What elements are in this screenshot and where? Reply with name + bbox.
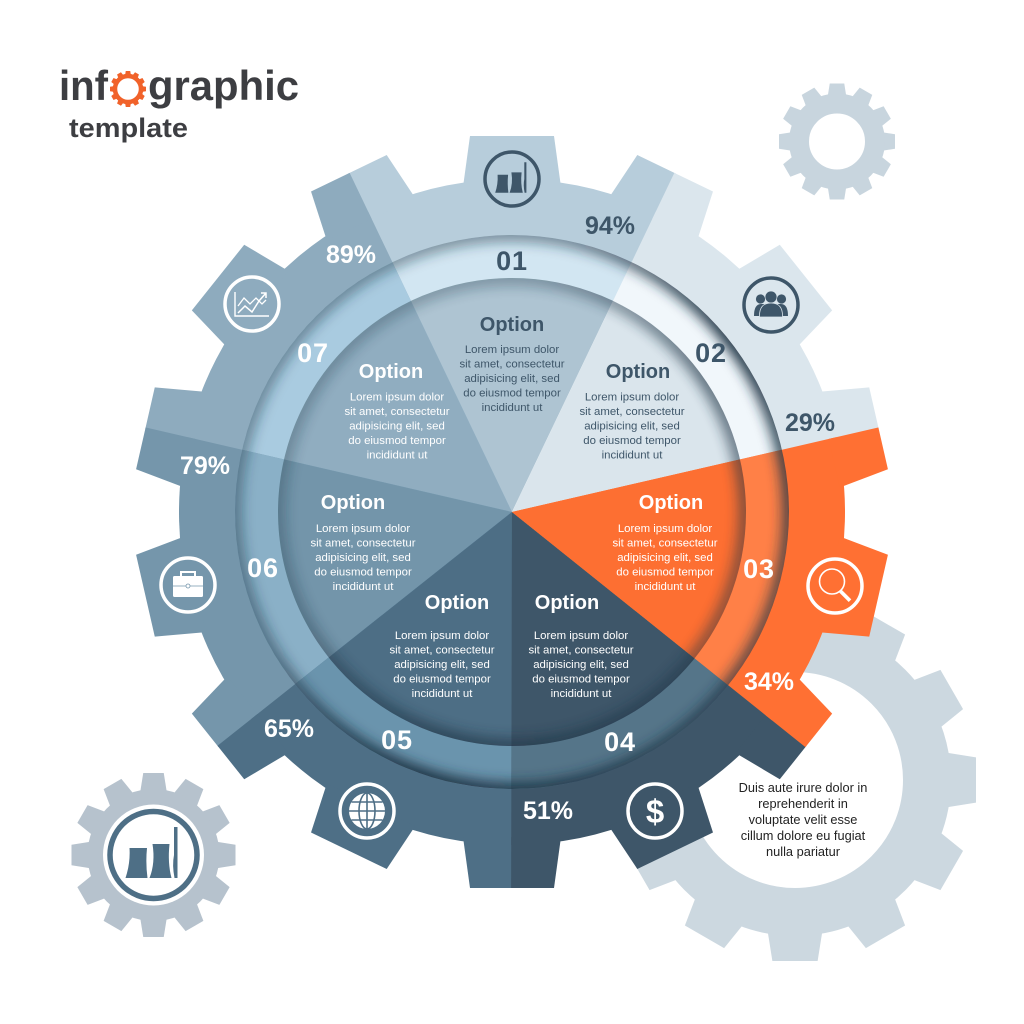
sector 01 [348, 136, 676, 512]
text block: option 06: sit amet, consectetur [310, 538, 416, 550]
text block: option 01 [459, 314, 565, 414]
logo title: inf [59, 62, 109, 109]
sector 05 [218, 512, 512, 888]
callout text: reprehenderit in [758, 796, 848, 811]
text block: option 07: Option [359, 361, 423, 383]
numbers and percentages: 07 [297, 338, 329, 368]
icon: globe [340, 784, 394, 838]
text block: option 07 [344, 361, 450, 462]
background gear: large lower right [614, 599, 976, 961]
text block: option 05: incididunt ut [412, 688, 473, 700]
icon: people [744, 278, 798, 332]
text block: option 05: sit amet, consectetur [389, 644, 495, 656]
icon: line chart [225, 277, 279, 331]
background gear: top right [779, 84, 895, 200]
text block: option 01: sit amet, consectetur [459, 358, 565, 370]
callout text: voluptate velit esse [749, 812, 857, 827]
callout text: cillum dolore eu fugiat [741, 828, 866, 843]
text block: option 06: incididunt ut [333, 581, 394, 593]
text block: option 07: incididunt ut [367, 450, 428, 462]
text block: option 06: Lorem ipsum dolor [316, 523, 410, 535]
text block: option 01: adipisicing elit, sed [464, 373, 560, 385]
text block: option 04: Option [535, 592, 599, 614]
text block: option 05: Option [425, 592, 489, 614]
text block: option 07: do eiusmod tempor [348, 435, 446, 447]
text block: option 01: incididunt ut [482, 402, 543, 414]
text block: option 02: do eiusmod tempor [583, 435, 681, 447]
numbers and percentages: 29% [785, 409, 835, 437]
text block: option 07: Lorem ipsum dolor [350, 392, 444, 404]
icon: factory [485, 152, 539, 206]
text block: option 02: Lorem ipsum dolor [585, 392, 679, 404]
text block: option 02 [579, 361, 685, 462]
numbers and percentages: 05 [381, 725, 413, 755]
numbers and percentages: 94% [585, 212, 635, 240]
logo gear icon [110, 71, 146, 107]
numbers and percentages: 34% [744, 668, 794, 696]
text block: option 01: Lorem ipsum dolor [465, 344, 559, 356]
numbers and percentages: 79% [180, 452, 230, 480]
text block: option 03: Lorem ipsum dolor [618, 523, 712, 535]
text block: option 05 [389, 592, 495, 700]
callout text: nulla pariatur [766, 844, 841, 859]
text block: option 03: adipisicing elit, sed [617, 552, 713, 564]
callout text: Duis aute irure dolor in [739, 780, 867, 795]
numbers and percentages: 51% [523, 797, 573, 825]
text block: option 03: Option [639, 492, 703, 514]
sector 03 [512, 428, 888, 747]
logo title: graphic [148, 62, 299, 109]
numbers and percentages: 06 [247, 553, 279, 583]
icon: magnifier [808, 559, 862, 613]
text block: option 07: sit amet, consectetur [344, 406, 450, 418]
text block: option 06 [310, 492, 416, 593]
sector 06 [136, 428, 512, 747]
text block: option 03: sit amet, consectetur [612, 538, 718, 550]
text block: option 06: Option [321, 492, 385, 514]
text block: option 02: Option [606, 361, 670, 383]
numbers and percentages: 04 [604, 727, 636, 757]
logo title: template [69, 113, 188, 143]
text block: option 05: Lorem ipsum dolor [395, 630, 489, 642]
text block: option 05: do eiusmod tempor [393, 674, 491, 686]
text block: option 03: do eiusmod tempor [616, 566, 714, 578]
text block: option 07: adipisicing elit, sed [349, 420, 445, 432]
text block: option 01: Option [480, 314, 544, 336]
text block: option 04: incididunt ut [551, 688, 612, 700]
numbers and percentages: 89% [326, 241, 376, 269]
text block: option 04: adipisicing elit, sed [533, 659, 629, 671]
numbers and percentages: 02 [695, 338, 727, 368]
disc shadow [269, 269, 755, 755]
text block: option 05: adipisicing elit, sed [394, 659, 490, 671]
numbers and percentages: 65% [264, 715, 314, 743]
icon: dollar [628, 784, 682, 838]
ring shadow [226, 226, 798, 798]
text block: option 03: incididunt ut [635, 581, 696, 593]
icon gear: bottom left with factory [72, 773, 236, 937]
text block: option 04: do eiusmod tempor [532, 674, 630, 686]
numbers and percentages [180, 212, 835, 825]
main gear [136, 136, 888, 888]
icon: briefcase [161, 558, 215, 612]
text block: option 04: Lorem ipsum dolor [534, 630, 628, 642]
text block: option 02: sit amet, consectetur [579, 406, 685, 418]
text block: option 03 [612, 492, 718, 593]
text block: option 04: sit amet, consectetur [528, 644, 634, 656]
logo title [59, 62, 299, 143]
sector 07 [145, 173, 512, 512]
sector 04 [511, 512, 806, 888]
text block: option 04 [528, 592, 634, 700]
numbers and percentages: 01 [496, 246, 528, 276]
text block: option 06: adipisicing elit, sed [315, 552, 411, 564]
callout text [739, 780, 867, 859]
text block: option 01: do eiusmod tempor [463, 388, 561, 400]
text block: option 06: do eiusmod tempor [314, 566, 412, 578]
sector 02 [512, 173, 878, 512]
icon: dollar: $ [646, 793, 664, 830]
numbers and percentages: 03 [743, 554, 775, 584]
text block: option 02: adipisicing elit, sed [584, 420, 680, 432]
text block: option 02: incididunt ut [602, 450, 663, 462]
